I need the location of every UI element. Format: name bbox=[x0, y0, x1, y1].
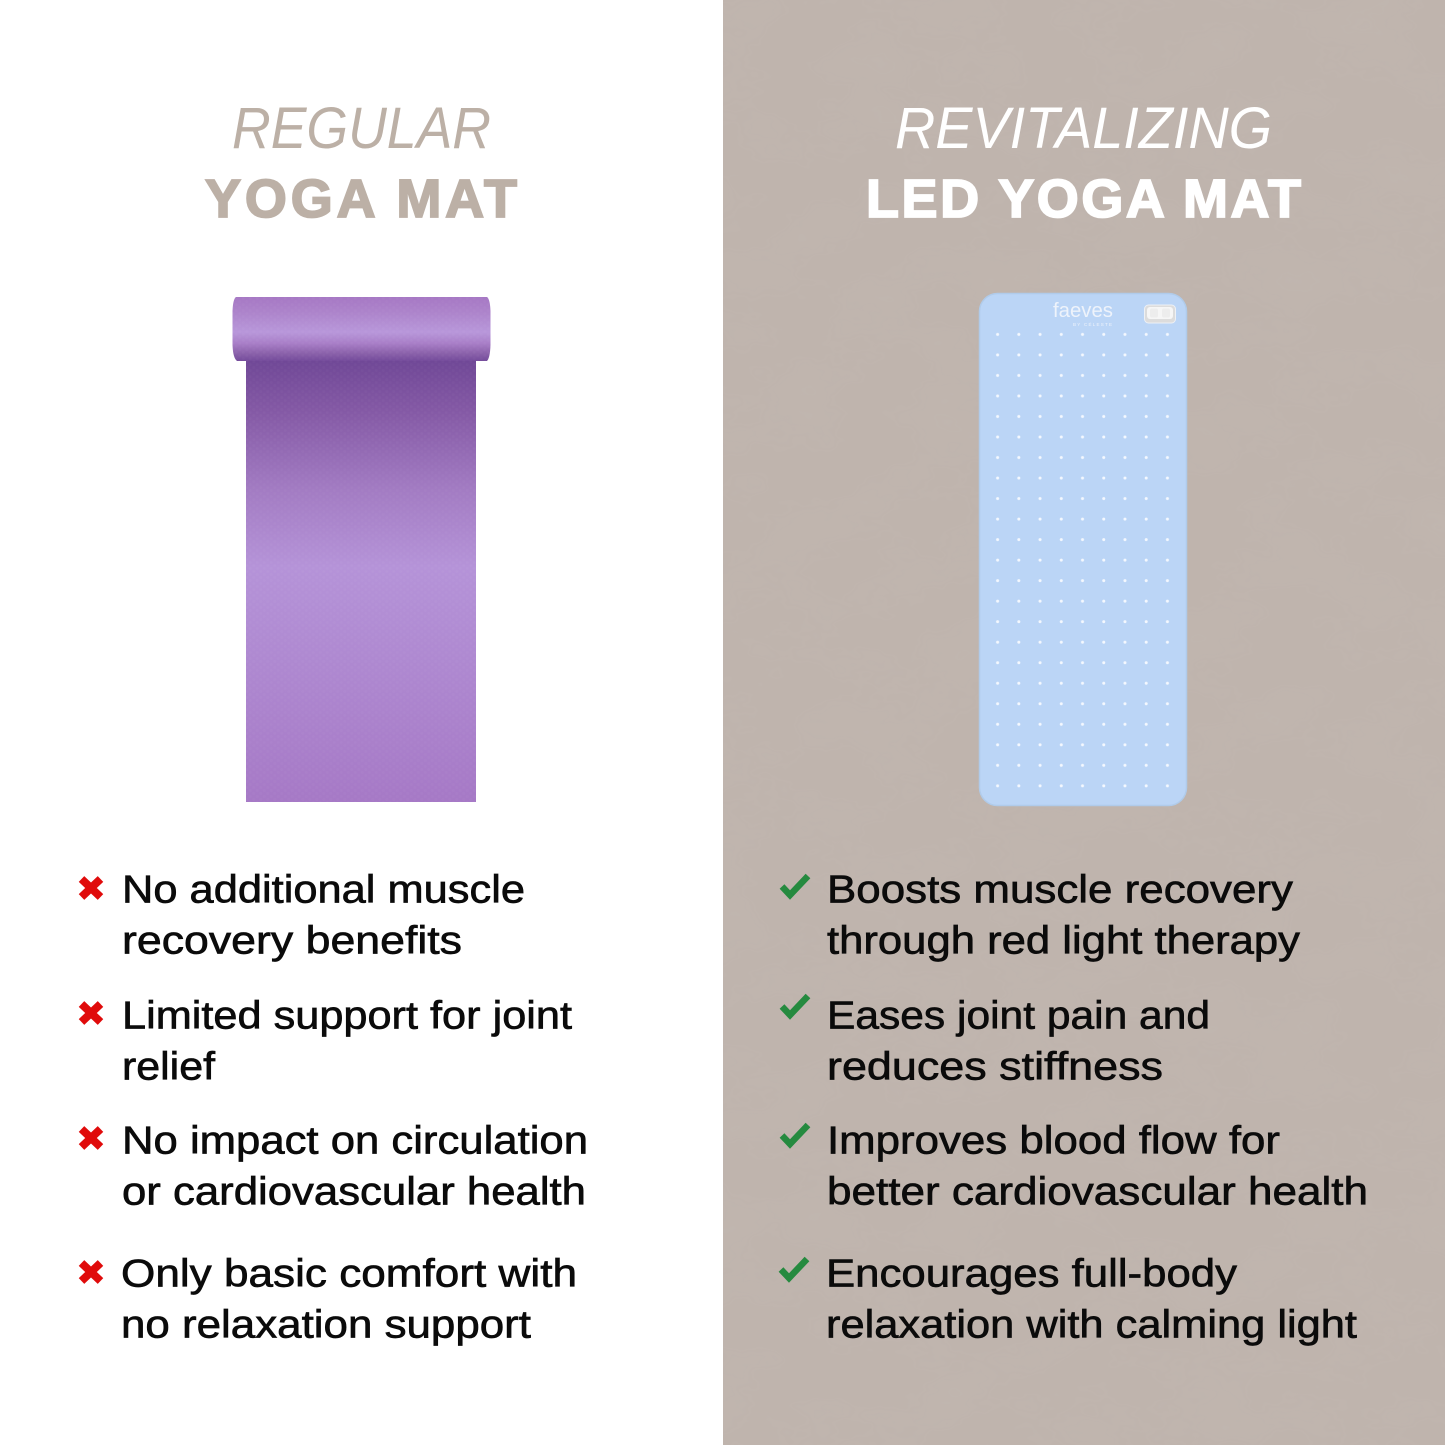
item: limited joint support bbox=[82, 994, 572, 1088]
item: no circulation impact bbox=[82, 1120, 588, 1214]
list: LED mat benefits bbox=[781, 868, 1368, 1346]
item: full-body relaxation: relaxation with calming light bbox=[826, 1304, 1357, 1346]
logo: faeves: faeves bbox=[1053, 300, 1113, 322]
illustration: purple rolled yoga mat bbox=[232, 297, 490, 802]
illustration: blue LED mat bbox=[980, 294, 1186, 806]
logo: faeves: BY CÉLESTE bbox=[1073, 321, 1112, 327]
item: full-body relaxation: Encourages full-body bbox=[826, 1252, 1238, 1296]
heading: regular yoga mat bbox=[205, 96, 517, 229]
item: muscle recovery: through red light therapy bbox=[827, 920, 1301, 962]
list: regular mat drawbacks bbox=[82, 868, 588, 1346]
item: no circulation impact: or cardiovascular health bbox=[122, 1170, 586, 1214]
item: blood flow bbox=[782, 1120, 1368, 1214]
item: full-body relaxation bbox=[781, 1252, 1357, 1346]
item: muscle recovery bbox=[782, 868, 1301, 962]
item: joint pain bbox=[782, 994, 1210, 1088]
item: no circulation impact: No impact on circulation bbox=[122, 1120, 588, 1162]
item: joint pain: reduces stiffness bbox=[827, 1046, 1163, 1088]
panel: revitalizing LED yoga mat bbox=[723, 0, 1445, 1445]
heading: revitalizing LED yoga mat: LED YOGA MAT bbox=[866, 169, 1301, 229]
item: no muscle recovery: No additional muscle bbox=[122, 868, 525, 912]
item: blood flow: better cardiovascular health bbox=[827, 1170, 1368, 1214]
item: muscle recovery: Boosts muscle recovery bbox=[827, 868, 1294, 912]
heading: regular yoga mat: YOGA MAT bbox=[205, 169, 517, 229]
heading: revitalizing LED yoga mat bbox=[866, 96, 1301, 229]
panel: regular yoga mat bbox=[0, 0, 723, 1445]
icon: control panel bbox=[1144, 305, 1176, 323]
heading: revitalizing LED yoga mat: REVITALIZING bbox=[895, 96, 1272, 161]
item: limited joint support: relief bbox=[122, 1046, 215, 1088]
item: basic comfort only bbox=[82, 1252, 577, 1346]
item: limited joint support: Limited support for joint bbox=[122, 994, 572, 1038]
item: no muscle recovery: recovery benefits bbox=[122, 920, 462, 962]
item: no muscle recovery bbox=[82, 868, 525, 962]
item: blood flow: Improves blood flow for bbox=[827, 1120, 1280, 1162]
heading: regular yoga mat: REGULAR bbox=[232, 96, 491, 161]
item: basic comfort only: Only basic comfort with bbox=[121, 1252, 577, 1296]
item: basic comfort only: no relaxation support bbox=[121, 1304, 531, 1346]
item: joint pain: Eases joint pain and bbox=[827, 994, 1210, 1038]
